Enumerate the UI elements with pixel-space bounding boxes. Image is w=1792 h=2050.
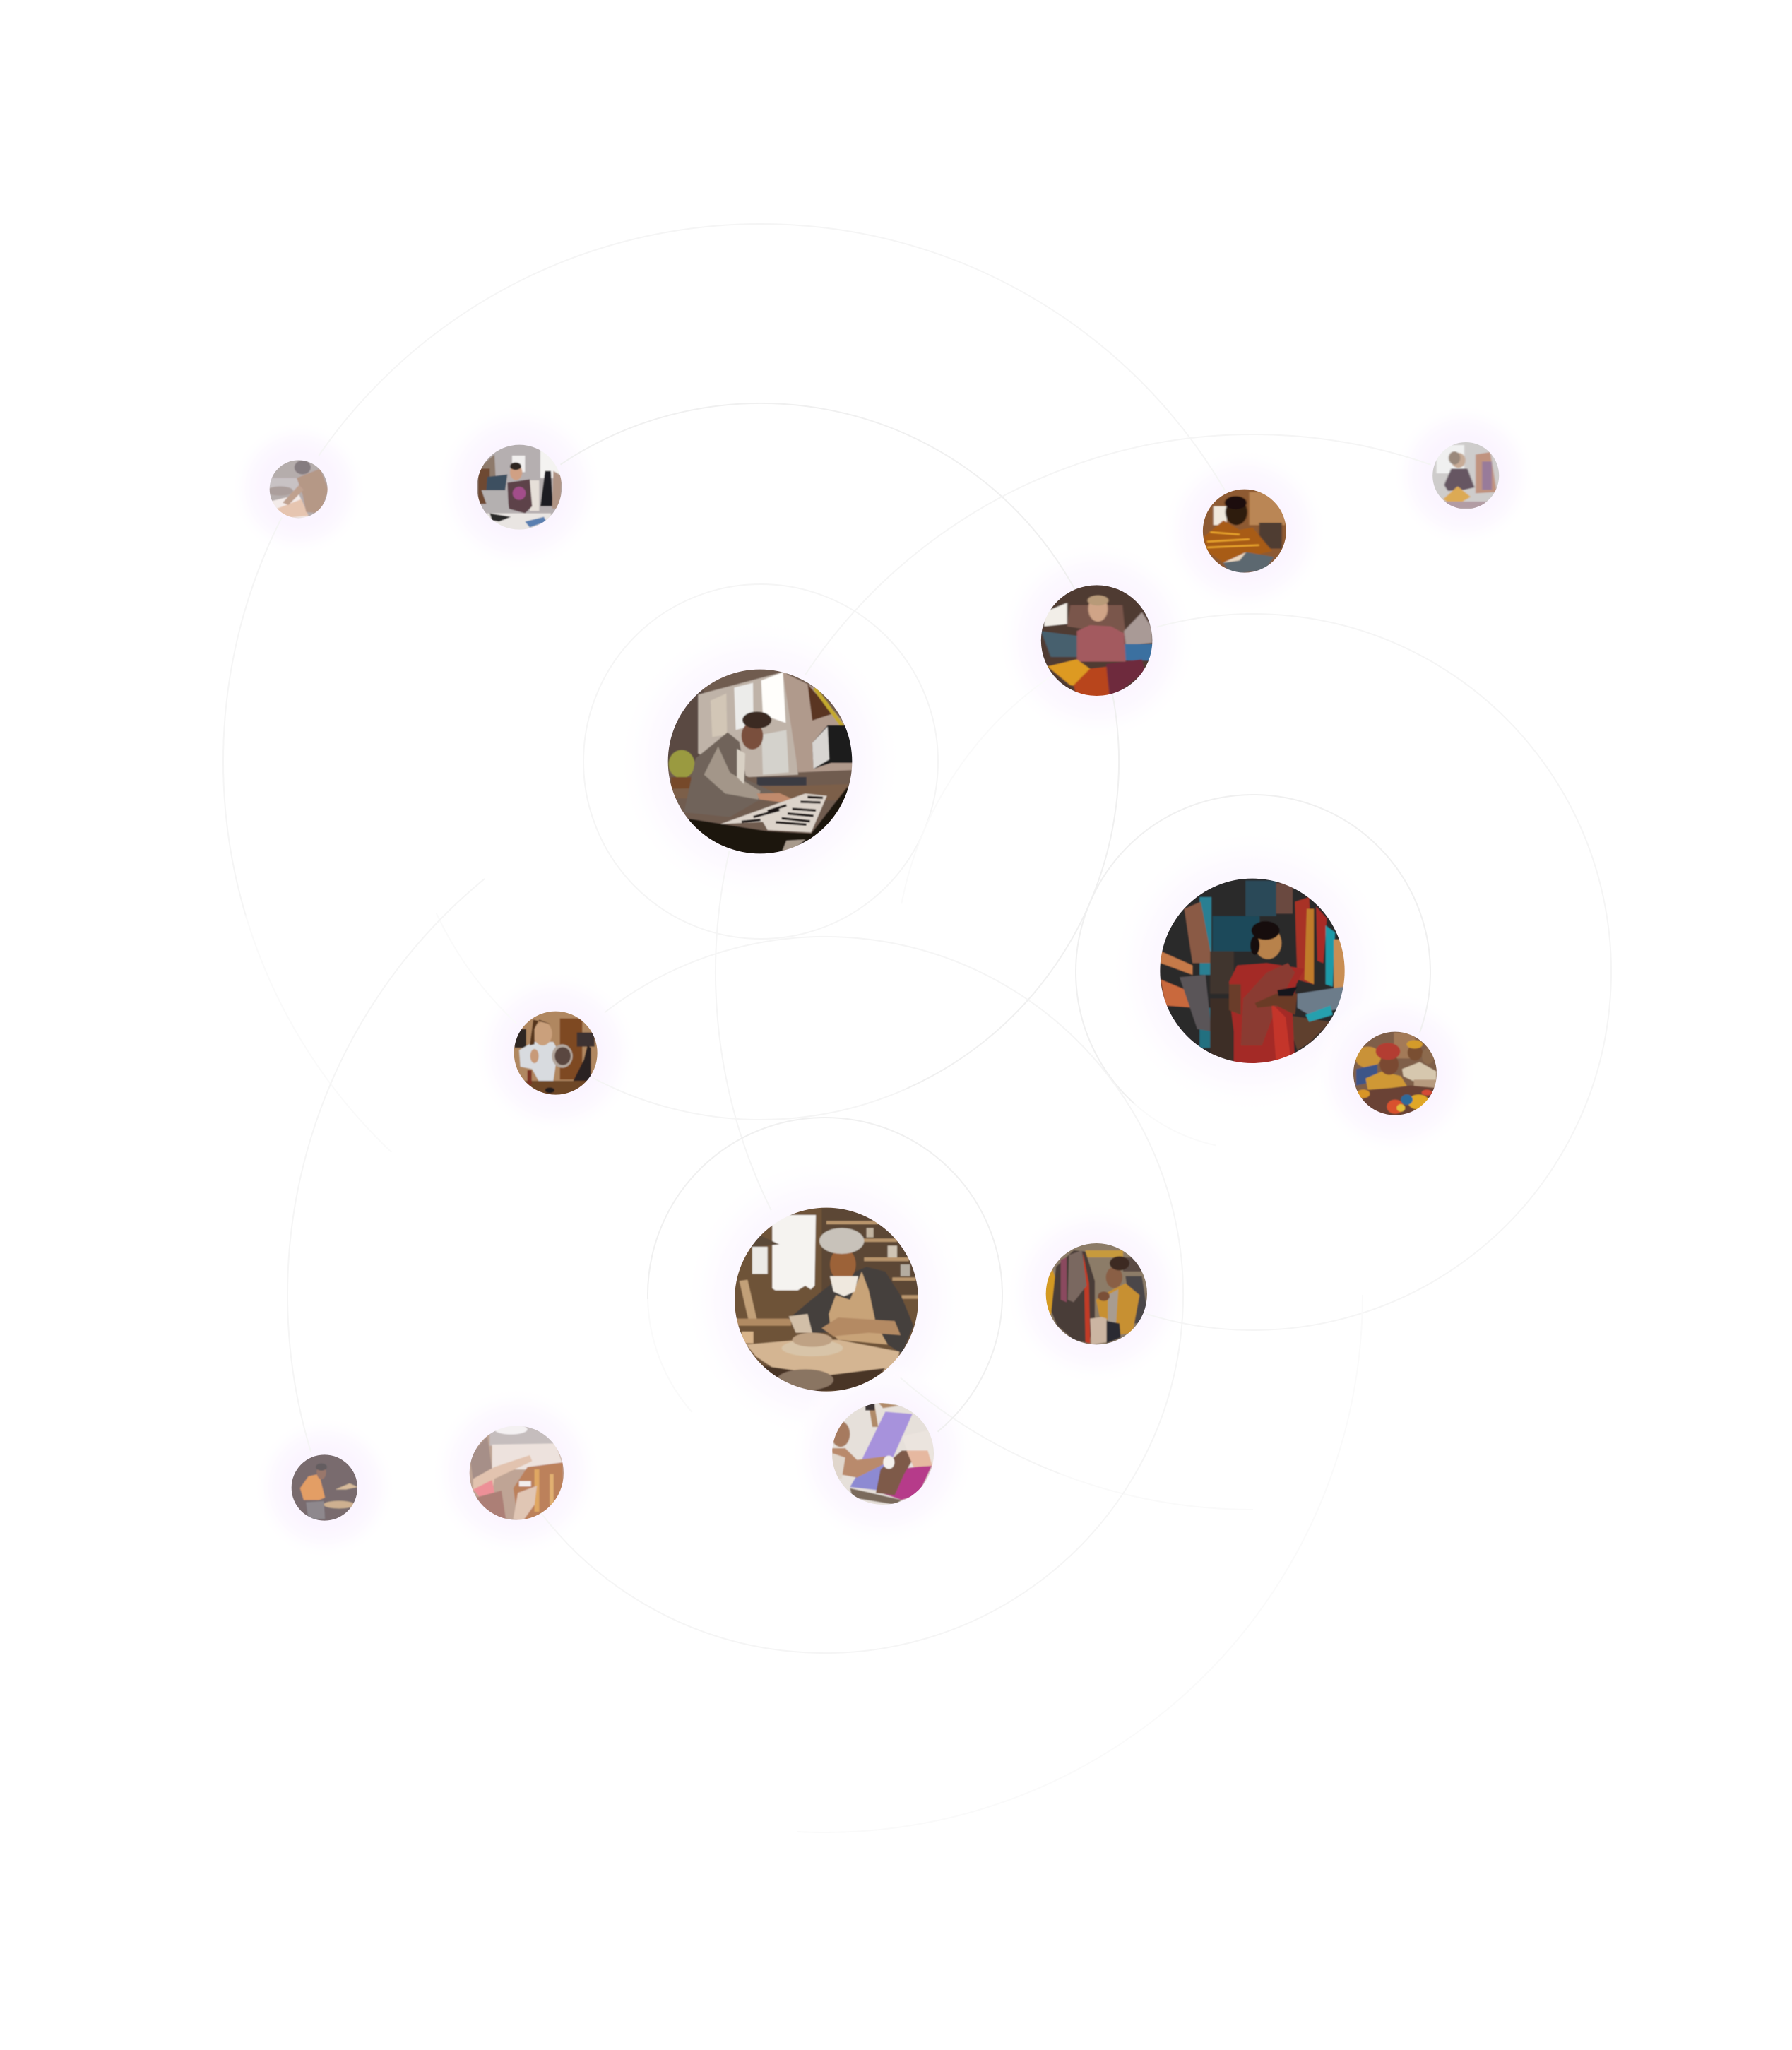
photo: girl painting a colourful canvas <box>831 1402 934 1506</box>
photo: faded drummer <box>291 1454 357 1521</box>
photo: faded woman sewing fabric <box>270 460 328 519</box>
photo: elderly potter at wheel <box>732 1207 920 1393</box>
photo: man in orange patterned shirt <box>1201 487 1288 574</box>
photo: woman with fabric by mannequin <box>1432 442 1499 509</box>
photo: musician at keyboard <box>668 670 852 853</box>
photo: faded hands sorting clothes on a rack <box>468 1423 565 1522</box>
photo: blonde woman with folded cloth <box>1040 584 1155 697</box>
photo: woman in yellow jacket browsing clothes <box>1044 1242 1149 1347</box>
photo: woman with make-up mirror and camera <box>514 1010 598 1097</box>
photo: woman in red sari with phone <box>1158 877 1347 1065</box>
photo: women with colourful fabric balls <box>1351 1030 1439 1118</box>
soft glow halos behind photos <box>232 404 1535 1558</box>
photo: fashion designer with laptop <box>475 444 563 532</box>
